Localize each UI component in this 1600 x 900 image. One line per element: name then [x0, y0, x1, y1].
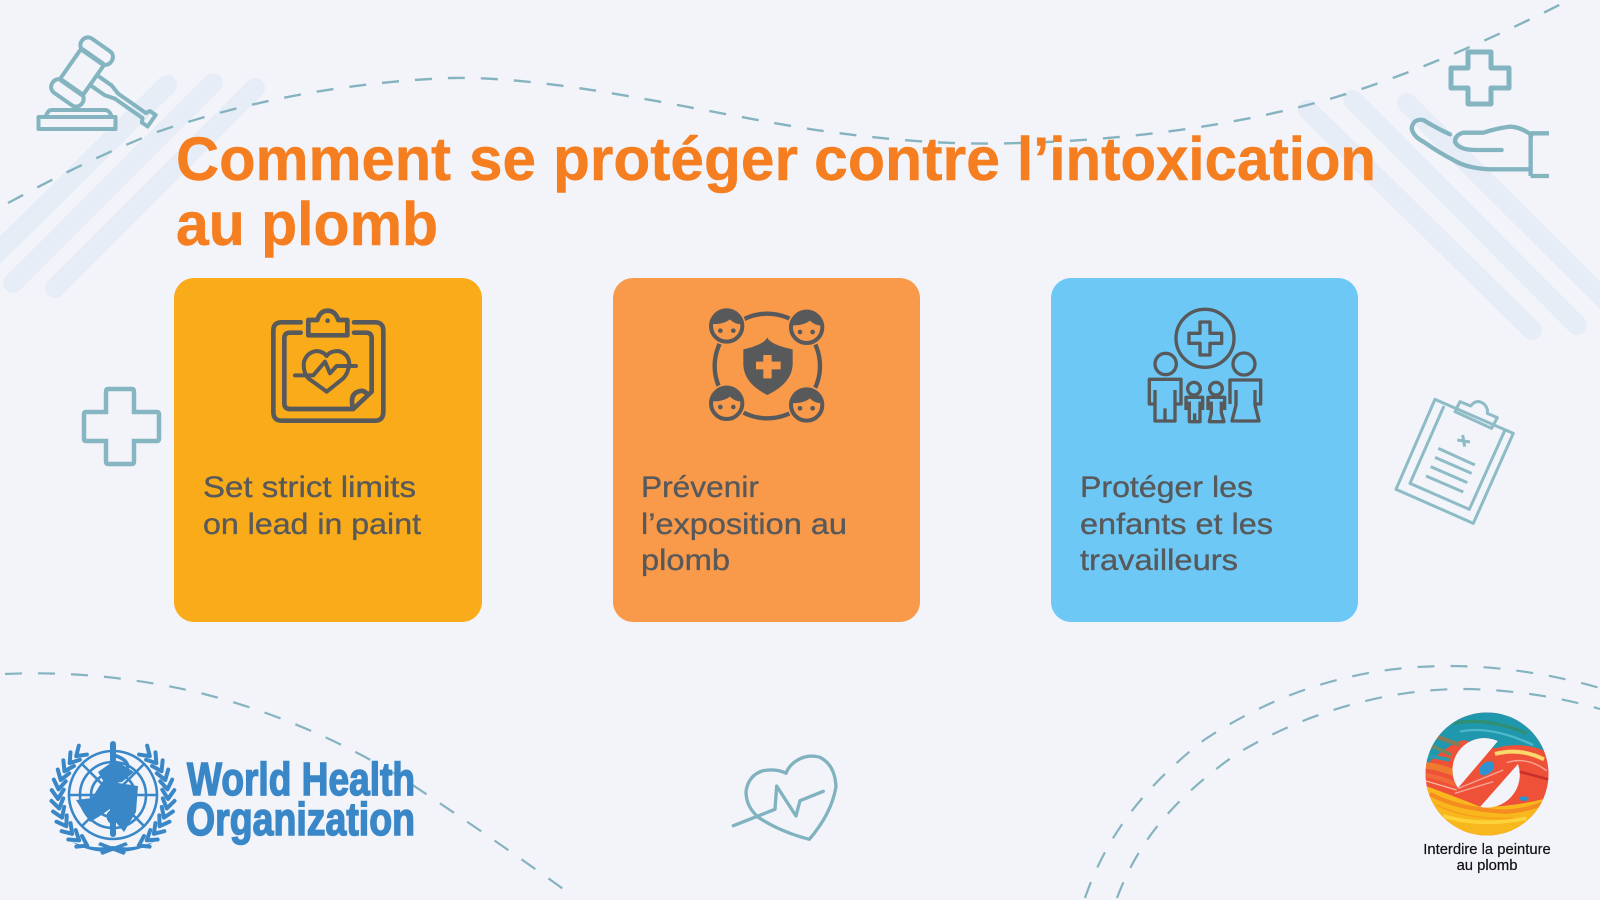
panel: protéger les enfants	[1051, 278, 1358, 622]
card text	[641, 471, 847, 577]
title: Comment	[176, 125, 451, 194]
dashed curve top	[8, 0, 1577, 203]
card text: enfants et les	[1080, 508, 1273, 541]
title: protéger	[553, 125, 798, 194]
emblem	[51, 741, 175, 855]
decorative diagonal stripes right	[1308, 100, 1600, 330]
icon: plus top right	[1451, 52, 1509, 104]
panel: prévenir l'exposition	[613, 278, 920, 622]
WHO logo: Organization	[186, 793, 415, 845]
icon: hand with plus	[1412, 52, 1549, 176]
icon: gavel	[38, 35, 171, 148]
panel: set strict limits	[174, 278, 482, 622]
dashed curve bottom left	[5, 673, 566, 891]
campaign logo: painted prohibition ring	[1426, 712, 1548, 836]
card text: Protéger les	[1080, 471, 1253, 504]
card text: plomb	[641, 544, 730, 577]
campaign caption: au plomb	[1457, 858, 1517, 874]
card text: on lead in paint	[203, 508, 421, 541]
title: contre	[814, 125, 1000, 194]
icon: people around shield	[709, 308, 824, 423]
icon: clipboard right	[1396, 399, 1513, 523]
card text: l’exposition au	[641, 508, 847, 541]
icon: family with plus	[1149, 309, 1261, 422]
campaign caption	[1423, 842, 1551, 874]
WHO logo	[51, 741, 415, 855]
decorative diagonal stripes left	[0, 83, 255, 288]
card text: Prévenir	[641, 471, 759, 504]
wordmark: World Health	[187, 753, 415, 805]
campaign caption: Interdire la peinture	[1423, 842, 1551, 858]
title: l’intoxication	[1017, 125, 1376, 194]
card text	[203, 471, 421, 541]
wreath leaves	[51, 746, 175, 851]
card text: travailleurs	[1080, 544, 1238, 577]
title: se	[469, 125, 536, 194]
title	[176, 125, 1376, 259]
icon: plus left	[84, 389, 159, 464]
card text	[1080, 471, 1273, 577]
dashed curves bottom right	[1085, 666, 1600, 898]
title: au plomb	[176, 190, 438, 259]
icon: clipboard with heart	[273, 311, 383, 421]
icon: heart with pulse	[733, 756, 836, 839]
card text: Set strict limits	[203, 471, 416, 504]
